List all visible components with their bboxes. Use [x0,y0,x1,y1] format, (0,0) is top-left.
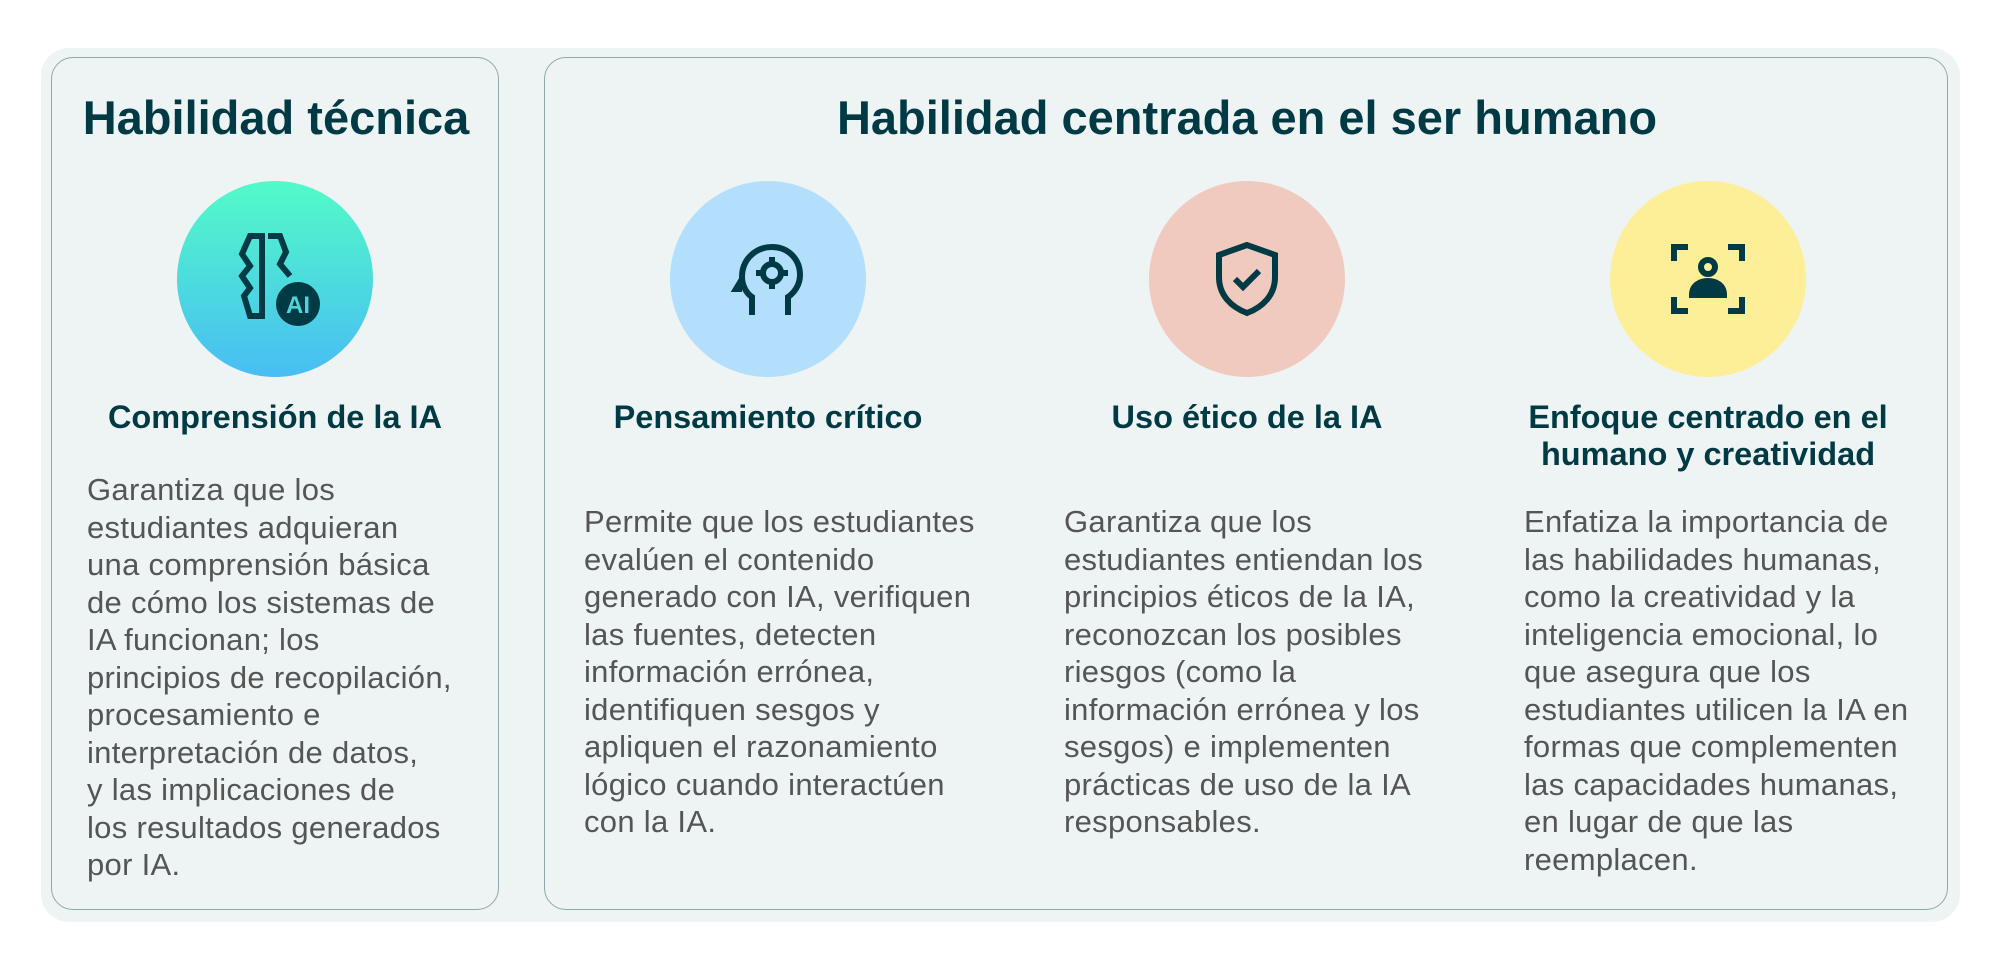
text: ethical use body: responsables. [1064,804,1261,839]
heading: Enfoque centrado en el humano y creatividad [1528,399,1888,472]
text: human focus body: como la creatividad y la [1524,579,1855,614]
heading: Enfoque centrado en el humano y creatividad: Enfoque centrado en el [1528,399,1888,435]
text: critical thinking body: identifiquen sesgos y [584,692,880,726]
panel: human-centred skill [544,57,1948,910]
text: human focus body: reemplacen. [1524,842,1698,876]
heading: Pensamiento crítico: Pensamiento crítico [614,399,922,435]
text: critical thinking body: generado con IA, verifiquen [584,579,971,614]
text: ethical use body: información errónea y los [1064,692,1420,726]
text: critical thinking body: información errónea, [584,654,874,689]
text: human focus body: en lugar de que las [1524,804,1793,839]
text: technical body: de cómo los sistemas de [87,584,435,620]
heading: Comprensión de la IA: Comprensión de la IA [108,399,442,435]
text: technical body: estudiantes adquieran [87,510,398,544]
text: human focus body: formas que complementen [1524,729,1898,764]
text: ethical use body: reconozcan los posibles [1064,616,1402,652]
text: technical body: por IA. [87,847,180,882]
text: technical body: una comprensión básica [87,547,430,582]
panel: technical skill [51,57,499,910]
text: human focus body: las habilidades humanas, [1524,542,1881,576]
text: ethical use body: sesgos) e implementen [1064,729,1391,764]
title: Habilidad centrada en el ser humano: Habilidad centrada en el ser humano [837,91,1657,144]
text: ethical use body: prácticas de uso de la IA [1064,766,1411,802]
text: technical body: procesamiento e [87,697,321,732]
icon: person in focus frame [1610,181,1806,377]
text: human focus body: que asegura que los [1524,654,1811,689]
text: human focus body: inteligencia emocional, lo [1524,616,1878,652]
text: critical thinking body: con la IA. [584,804,716,839]
text: critical thinking body: apliquen el razonamiento [584,729,938,764]
text: human focus body [1524,504,1908,876]
text: technical body [87,472,452,882]
text: ethical use body: estudiantes entiendan los [1064,542,1423,576]
text: ethical use body: principios éticos de la IA, [1064,579,1415,614]
text: critical thinking body [584,504,975,839]
text: human focus body: Enfatiza la importancia de [1524,504,1888,539]
text: critical thinking body: evalúen el contenido [584,542,874,576]
text: technical body: principios de recopilación, [87,660,452,694]
text: critical thinking body: lógico cuando interactúen [584,766,945,802]
icon: head with gear [670,181,866,377]
text: critical thinking body: las fuentes, detecten [584,616,876,652]
text: ethical use body: riesgos (como la [1064,654,1296,689]
text: ethical use body [1064,504,1423,839]
icon: AI brain [177,181,373,377]
text: human focus body: las capacidades humanas, [1524,766,1898,802]
heading: Uso ético de la IA: Uso ético de la IA [1112,399,1382,435]
heading: Enfoque centrado en el humano y creatividad: humano y creatividad [1541,436,1875,472]
text: human focus body: estudiantes utilicen la IA en [1524,692,1908,726]
text: ethical use body: Garantiza que los [1064,504,1312,539]
title: Habilidad técnica: Habilidad técnica [83,91,469,144]
text: technical body: IA funcionan; los [87,622,320,657]
text: technical body: interpretación de datos, [87,734,418,770]
icon: AI brain: AI [286,292,310,319]
text: critical thinking body: Permite que los estudiantes [584,504,975,539]
text: technical body: Garantiza que los [87,472,335,507]
icon: shield check [1149,181,1345,377]
text: technical body: y las implicaciones de [87,772,395,807]
text: technical body: los resultados generados [87,810,441,844]
